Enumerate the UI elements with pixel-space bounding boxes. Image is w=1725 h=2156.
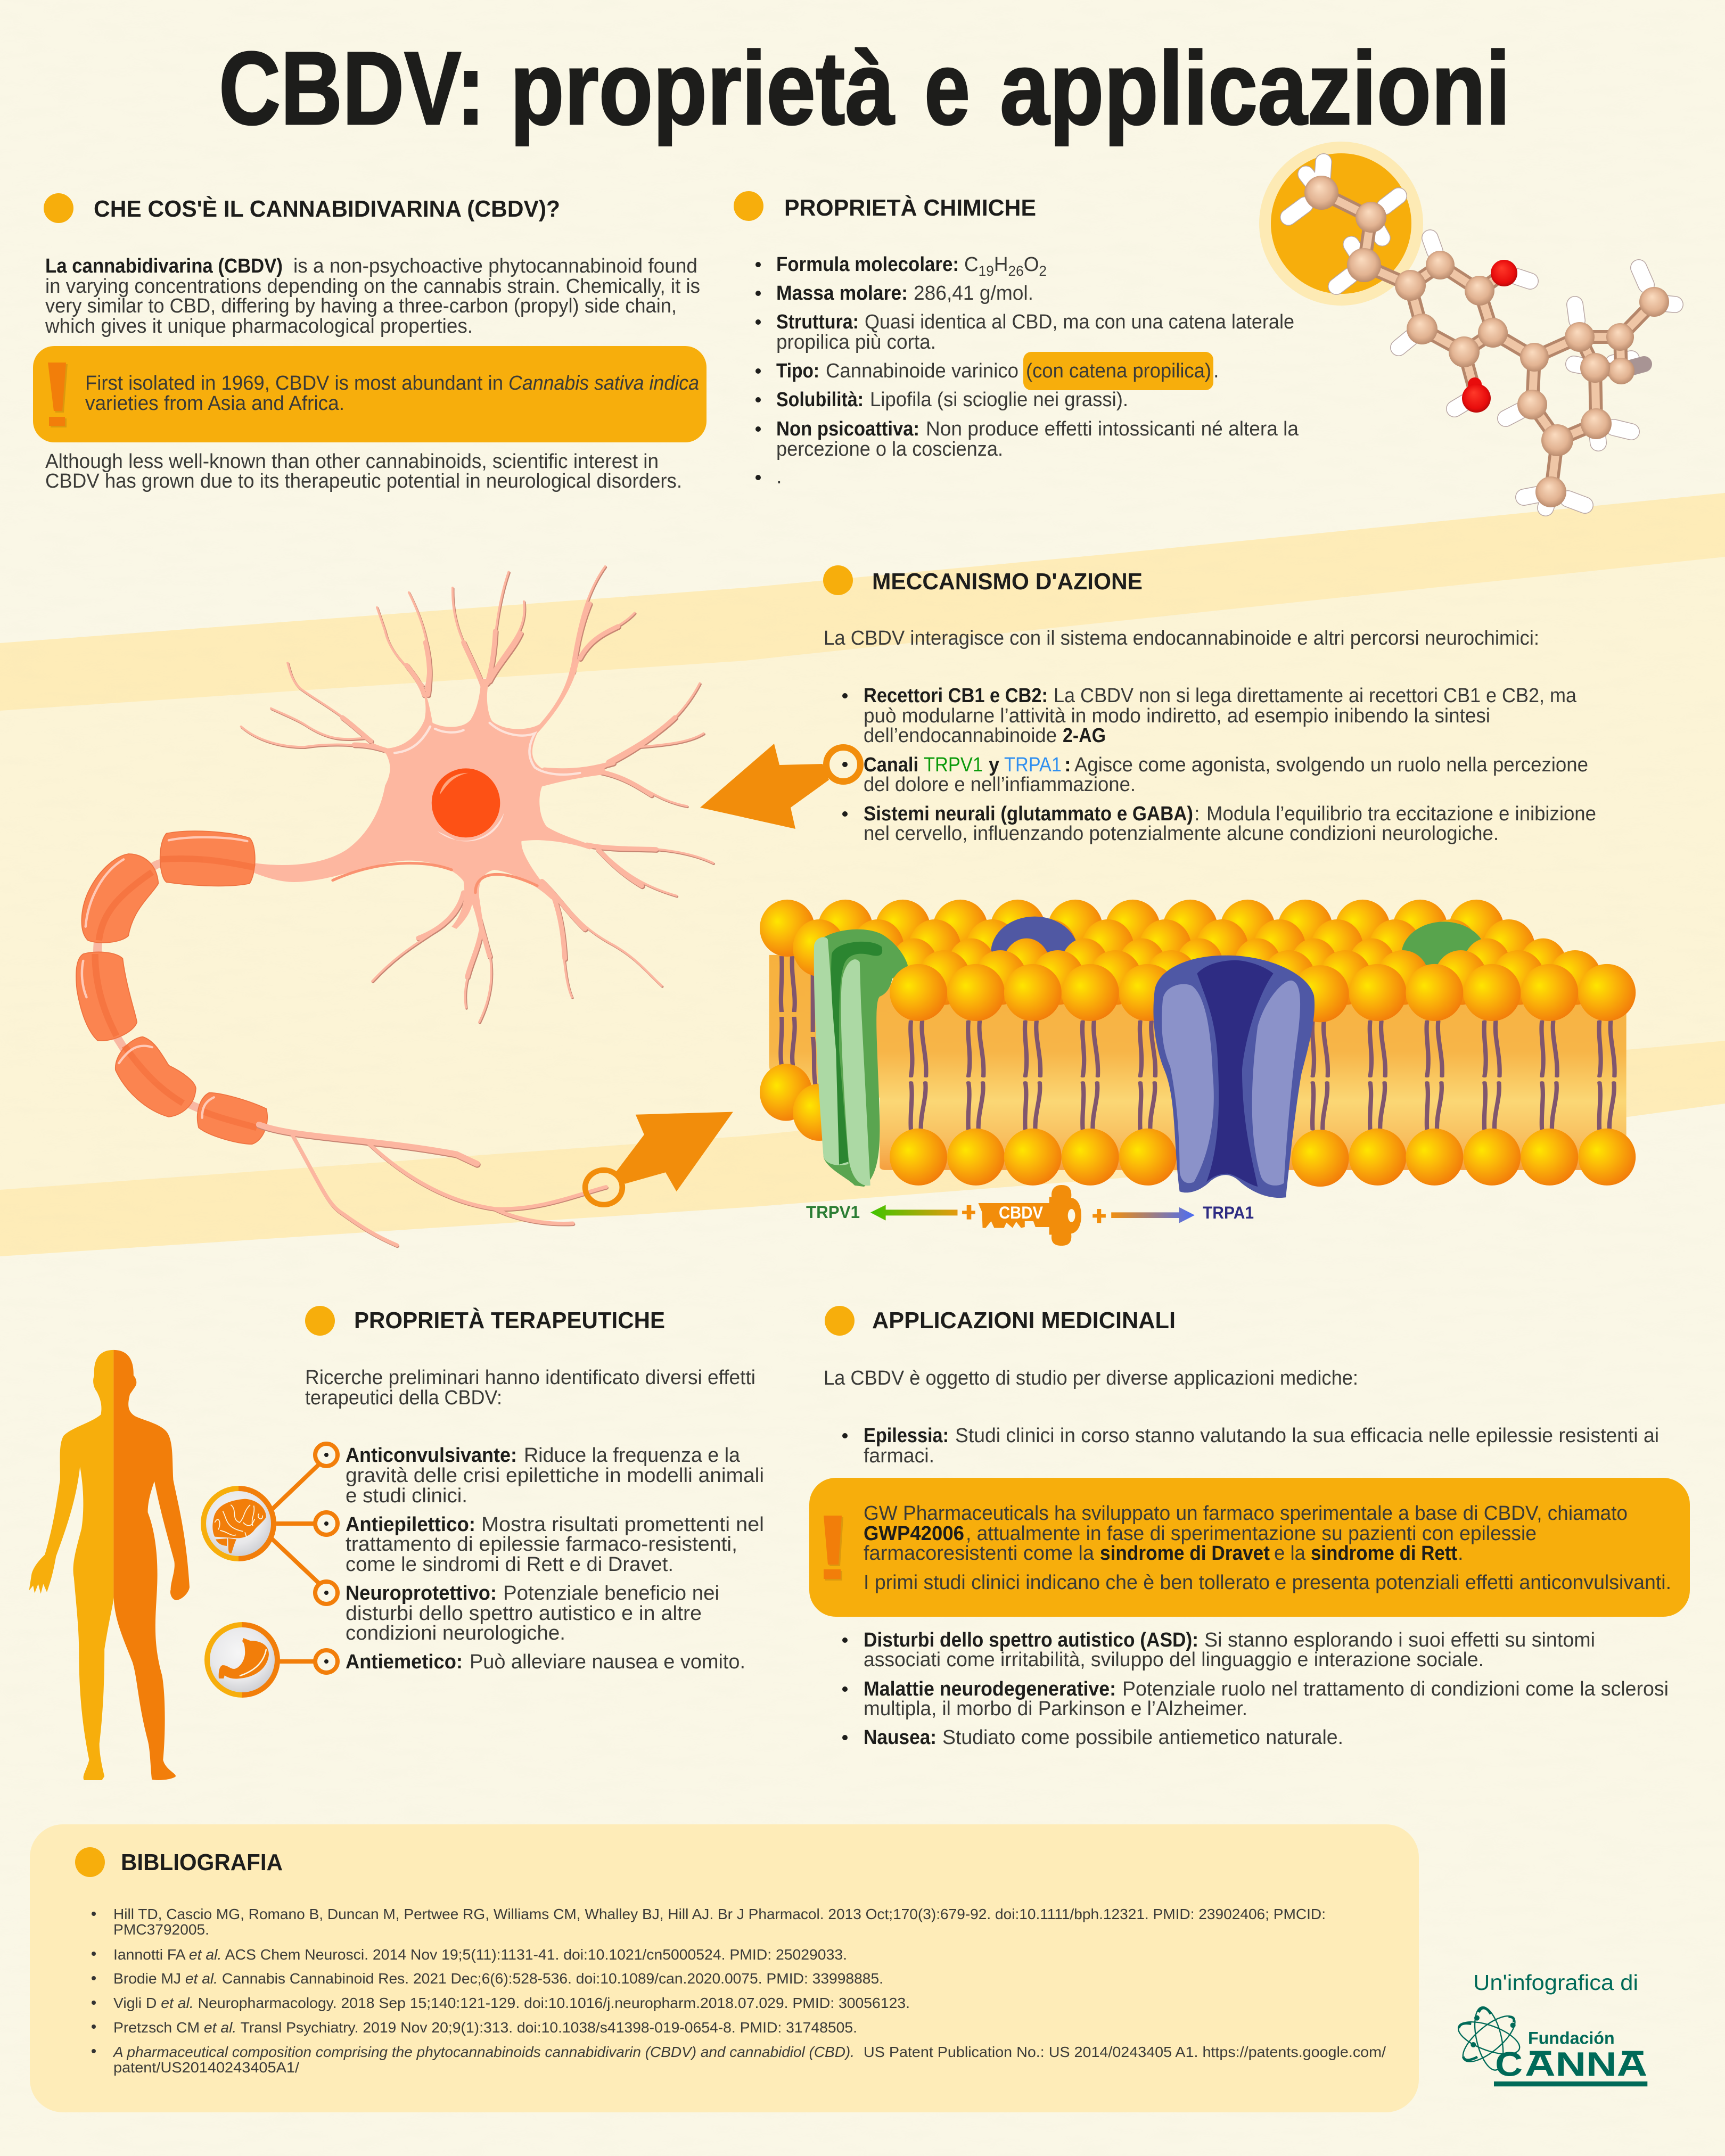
heading: BIBLIOGRAFIA	[121, 1849, 283, 1875]
dendrites	[241, 566, 714, 1023]
list: other applications: associati come irritabilità, sviluppo del linguaggio e interazione sociale.	[864, 1649, 1484, 1671]
list: chemical properties: Solubilità:	[776, 389, 864, 411]
arrow: to TRPV1	[870, 1205, 975, 1221]
axon	[97, 860, 266, 1126]
label: CBDV: CBDV	[999, 1203, 1044, 1222]
list: other applications: Malattie neurodegenerative:	[864, 1678, 1116, 1700]
title: applicazioni	[1000, 30, 1510, 146]
bullet: section dot	[305, 1306, 335, 1336]
callout: first isolated: Cannabis sativa indica	[508, 372, 699, 394]
list: epilepsy	[842, 1425, 1659, 1467]
list: therapeutic effects: disturbi dello spettro autistico e in altre	[346, 1602, 702, 1625]
list: mechanisms: 2-AG	[1063, 725, 1106, 747]
section: meccanismo d'azione	[700, 565, 1596, 845]
list: therapeutic effects: gravità delle crisi epilettiche in modelli animali	[346, 1464, 764, 1487]
icon: human body silhouette	[29, 1350, 190, 1780]
text block: intro: in varying concentrations depending on the cannabis strain. Chemically, it is	[45, 275, 700, 298]
list: chemical properties: 19	[979, 263, 994, 279]
lipid tails	[910, 1021, 1615, 1130]
list: mechanisms: Canali	[864, 754, 918, 776]
list: mechanisms: Sistemi neurali (glutammato e GABA)	[864, 803, 1193, 825]
bullet: section dot	[825, 1306, 855, 1336]
list: therapeutic effects: Anticonvulsivante:	[346, 1444, 517, 1467]
label: TRPV1: TRPV1	[806, 1203, 860, 1222]
list: therapeutic effects: Antiepilettico:	[346, 1513, 475, 1536]
list: chemical properties: 26	[1008, 263, 1024, 279]
callout: GWP42006: GWP42006	[864, 1523, 964, 1545]
list: mechanisms: Modula l’equilibrio tra eccitazione e inibizione	[1206, 803, 1596, 825]
list: chemical properties: Non produce effetti intossicanti né altera la	[926, 418, 1299, 440]
label: TRPA1: TRPA1	[1203, 1203, 1254, 1222]
axon terminals	[259, 1125, 606, 1246]
list: epilepsy: Studi clinici in corso stanno valutando la sua efficacia nelle epilessie resistenti ai	[955, 1425, 1659, 1447]
lipid heads: middle rows	[890, 939, 1601, 1005]
callout: first isolated	[33, 346, 707, 442]
list: mechanisms: :	[1194, 803, 1200, 825]
text block: intro: La CBDV interagisce con il sistema endocannabinoide e altri percorsi neurochimici:	[824, 627, 1539, 649]
heading: PROPRIETÀ CHIMICHE	[784, 194, 1036, 221]
neuron illustration	[76, 566, 733, 1246]
list: therapeutic effects: trattamento di epilessie farmaco-resistenti,	[346, 1533, 737, 1556]
icon: stomach	[204, 1622, 280, 1698]
callout: GWP42006	[809, 1478, 1690, 1617]
list: therapeutic effects: come le sindromi di Rett e di Dravet.	[346, 1553, 673, 1576]
cell membrane illustration	[760, 900, 1636, 1198]
text block: intro: is a non-psychoactive phytocannabinoid found	[293, 255, 697, 277]
bullet: section dot	[75, 1847, 105, 1877]
list: epilepsy: farmaci.	[864, 1445, 934, 1467]
molecule: CBDV ball and stick	[1259, 142, 1675, 508]
callout: GWP42006: e la	[1274, 1542, 1306, 1565]
logo: Fundación CANNA	[1455, 2004, 1647, 2086]
text block: intro: terapeutici della CBDV:	[305, 1387, 502, 1409]
text block: intro: La CBDV è oggetto di studio per diverse applicazioni mediche:	[824, 1367, 1358, 1389]
list: chemical properties: propilica più corta.	[776, 331, 936, 353]
list: chemical properties: 2	[1039, 263, 1047, 279]
text block: closing: Although less well-known than other cannabinoids, scientific interest in	[45, 450, 659, 473]
protein: back domains	[991, 917, 1486, 989]
icon: connector lines	[270, 1464, 319, 1661]
list: chemical properties: Tipo:	[776, 360, 819, 382]
list: mechanisms: TRPA1	[1004, 754, 1062, 776]
list: mechanisms: TRPV1	[924, 754, 983, 776]
list: therapeutic effects: Riduce la frequenza e la	[524, 1444, 741, 1467]
title: CBDV:	[219, 30, 485, 146]
list: chemical properties: percezione o la coscienza.	[776, 438, 1003, 460]
list: chemical properties: 286,41 g/mol.	[914, 282, 1033, 305]
list: chemical properties: Formula molecolare:	[776, 253, 959, 276]
bullet: section dot	[734, 191, 763, 221]
list: mechanisms: Recettori CB1 e CB2:	[864, 685, 1048, 707]
list: chemical properties: C	[964, 253, 979, 276]
list: therapeutic effects: e studi clinici.	[346, 1485, 467, 1507]
list: other applications	[842, 1629, 1669, 1749]
callout: GWP42006: , attualmente in fase di sperimentazione su pazienti con epilessie	[966, 1523, 1537, 1545]
membrane body	[769, 955, 1627, 1170]
arrow: receptor bullet to neuron	[700, 744, 860, 829]
text block: intro	[305, 1367, 755, 1409]
list: references: Iannotti FA et al. ACS Chem Neurosci. 2014 Nov 19;5(11):1131-41. doi:10.1021/cn5000524. PMID: 25029033.	[113, 1946, 847, 1963]
key diagram: CBDV acting on TRPV1 and TRPA1	[806, 1185, 1254, 1246]
list: chemical properties: H	[994, 253, 1008, 276]
highlight: con catena propilica	[1023, 352, 1213, 390]
list: mechanisms	[842, 685, 1596, 845]
list: other applications: Studiato come possibile antiemetico naturale.	[942, 1726, 1343, 1749]
callout: GWP42006: .	[1458, 1542, 1464, 1565]
list: therapeutic effects: Può alleviare nausea e vomito.	[470, 1651, 745, 1673]
title: proprietà	[510, 30, 894, 146]
bullet: section dot	[823, 565, 853, 595]
list: therapeutic effects	[346, 1444, 764, 1673]
protein channel: TRPV1	[814, 929, 908, 1187]
heading: CHE COS'È IL CANNABIDIVARINA (CBDV)?	[94, 195, 560, 222]
protein channel: TRPA1	[1153, 956, 1315, 1198]
logotype: ANNA	[1525, 2045, 1647, 2083]
list: references: A pharmaceutical composition comprising the phytocannabinoids cannabidivarin (CBDV) and cannabidiol (CBD).	[112, 2044, 855, 2060]
list: references: Hill TD, Cascio MG, Romano B, Duncan M, Pertwee RG, Williams CM, Whalley BJ, Hill AJ. Br J Pharmacol. 2013 Oct;170(3):679-92. doi:10.1111/bph.12321. PMID: 23902406; PMCID:	[113, 1906, 1326, 1922]
list: mechanisms: può modularne l’attività in modo indiretto, ad esempio inibendo la sintesi	[864, 705, 1490, 727]
list: other applications: Potenziale ruolo nel trattamento di condizioni come la sclerosi	[1122, 1678, 1669, 1700]
myelin sheath segments	[76, 831, 267, 1144]
markers: effect rings	[315, 1444, 338, 1673]
logotype: Fundación	[1528, 2028, 1615, 2047]
list: chemical properties	[755, 253, 1299, 488]
text block: intro	[45, 255, 700, 338]
list: references	[92, 1906, 1386, 2076]
list: references: Brodie MJ et al. Cannabis Cannabinoid Res. 2021 Dec;6(6):528-536. doi:10.1089/can.2020.0075. PMID: 33998885.	[113, 1970, 883, 1987]
icon: exclamation mark	[824, 1516, 843, 1581]
list: mechanisms: Agisce come agonista, svolgendo un ruolo nella percezione	[1074, 754, 1588, 776]
list: mechanisms: dell’endocannabinoide	[864, 725, 1057, 747]
list: other applications: Disturbi dello spettro autistico (ASD):	[864, 1629, 1198, 1651]
title: e	[924, 30, 970, 146]
highlight: con catena propilica: (con catena propilica)	[1026, 360, 1211, 382]
list: mechanisms: La CBDV non si lega direttamente ai recettori CB1 e CB2, ma	[1054, 685, 1577, 707]
bullet: section dot	[44, 193, 73, 223]
list: epilepsy: Epilessia:	[864, 1425, 949, 1447]
list: therapeutic effects: Neuroprotettivo:	[346, 1582, 497, 1604]
panel: bibliografia	[30, 1824, 1419, 2112]
list: mechanisms: del dolore e nell’infiammazione.	[864, 773, 1136, 796]
list: chemical properties: Non psicoattiva:	[776, 418, 919, 440]
text block: closing: CBDV has grown due to its therapeutic potential in neurological disorders.	[45, 470, 682, 492]
list: chemical properties: O	[1024, 253, 1039, 276]
callout: GWP42006: sindrome di Dravet	[1100, 1542, 1270, 1565]
list: references: PMC3792005.	[113, 1921, 209, 1938]
list: other applications: Nausea:	[864, 1726, 937, 1749]
credit: Un'infografica di: Un'infografica di	[1473, 1970, 1638, 1995]
callout: GWP42006: GW Pharmaceuticals ha sviluppato un farmaco sperimentale a base di CBDV, chiamato	[864, 1502, 1628, 1525]
list: references: Vigli D et al. Neuropharmacology. 2018 Sep 15;140:121-129. doi:10.1016/j.neuropharm.2018.07.029. PMID: 30056123.	[113, 1995, 910, 2011]
list: mechanisms: y	[989, 754, 999, 776]
list: therapeutic effects: condizioni neurologiche.	[346, 1622, 565, 1644]
logotype	[1494, 2028, 1647, 2086]
list: other applications: multipla, il morbo di Parkinson e l’Alzheimer.	[864, 1698, 1247, 1720]
list: mechanisms: nel cervello, influenzando potenzialmente alcune condizioni neurologiche.	[864, 822, 1499, 845]
lipid heads: back rows	[760, 900, 1535, 976]
section: applicazioni medicinali	[809, 1306, 1690, 1749]
section: che cos'è	[33, 193, 707, 492]
section: proprietà chimiche	[734, 191, 1299, 488]
icon: key	[979, 1185, 1081, 1246]
list: chemical properties: .	[776, 466, 782, 488]
title	[219, 30, 1510, 146]
callout: first isolated: varieties from Asia and Africa.	[85, 392, 344, 415]
list: references: US Patent Publication No.: US 2014/0243405 A1. https://patents.google.com/	[864, 2044, 1386, 2060]
list: mechanisms: :	[1064, 754, 1071, 776]
list: chemical properties: Quasi identica al CBD, ma con una catena laterale	[865, 311, 1294, 333]
text block: intro: very similar to CBD, differing by having a three-carbon (propyl) side chain,	[45, 295, 677, 317]
arrow: to TRPA1	[1092, 1207, 1195, 1223]
heading: APPLICAZIONI MEDICINALI	[872, 1307, 1176, 1334]
text block: intro: La cannabidivarina (CBDV)	[45, 255, 283, 277]
icon: exclamation mark	[48, 363, 68, 427]
list: chemical properties: Massa molare:	[776, 282, 908, 305]
text block: intro: Ricerche preliminari hanno identificato diversi effetti	[305, 1367, 755, 1389]
list: chemical properties: Struttura:	[776, 311, 859, 333]
list: therapeutic effects: Mostra risultati promettenti nel	[481, 1513, 764, 1536]
arrow: axon terminal to membrane	[585, 1112, 733, 1205]
heading: MECCANISMO D'AZIONE	[872, 569, 1143, 595]
list: references: Pretzsch CM et al. Transl Psychiatry. 2019 Nov 20;9(1):313. doi:10.1038/s41398-019-0654-8. PMID: 31748505.	[113, 2019, 857, 2036]
callout: GWP42006: sindrome di Rett	[1311, 1542, 1457, 1565]
list: chemical properties: Cannabinoide varinico	[826, 360, 1018, 382]
callout: GWP42006: farmacoresistenti come la	[864, 1542, 1095, 1565]
callout: GWP42006: I primi studi clinici indicano che è ben tollerato e presenta potenziali effetti anticonvulsivanti.	[864, 1571, 1671, 1594]
section: proprietà terapeutiche	[305, 1306, 764, 1673]
list: chemical properties: .	[1213, 360, 1219, 382]
text block: closing	[45, 450, 682, 492]
callout: first isolated: First isolated in 1969, CBDV is most abundant in	[85, 372, 503, 394]
list: other applications: Si stanno esplorando i suoi effetti su sintomi	[1204, 1629, 1595, 1651]
list: chemical properties: Lipofila (si scioglie nei grassi).	[870, 389, 1128, 411]
highlight circle: propyl chain	[1259, 142, 1423, 306]
logotype: C	[1495, 2045, 1523, 2083]
icon: brain	[201, 1486, 276, 1561]
list: references: patent/US20140243405A1/	[113, 2059, 299, 2076]
back lipids	[760, 956, 845, 1141]
icon: atom	[1455, 2004, 1524, 2073]
list: therapeutic effects: Potenziale beneficio nei	[503, 1582, 719, 1604]
heading: PROPRIETÀ TERAPEUTICHE	[354, 1307, 665, 1334]
soma	[254, 656, 606, 936]
nucleus	[432, 768, 504, 842]
list: therapeutic effects: Antiemetico:	[346, 1651, 463, 1673]
lipid heads: front rows	[890, 964, 1636, 1187]
text block: intro: which gives it unique pharmacological properties.	[45, 315, 473, 338]
